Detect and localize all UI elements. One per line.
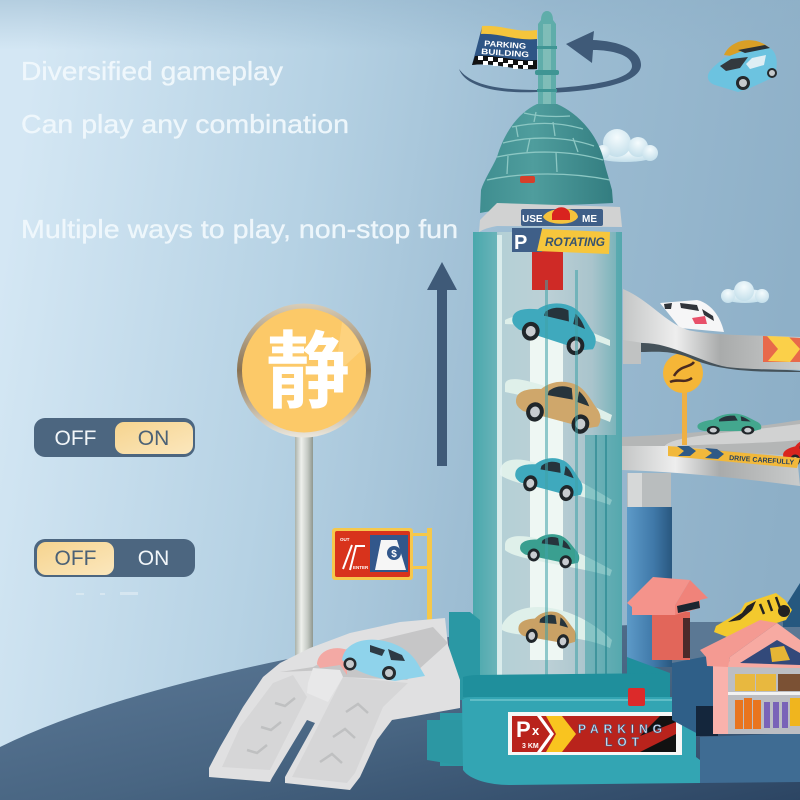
quiet sign xyxy=(237,304,371,661)
spiral shelves xyxy=(500,316,612,648)
shelf goods xyxy=(735,674,755,691)
parking lot label xyxy=(508,712,682,755)
red dome light xyxy=(520,176,535,183)
text: headline lines: Multiple ways to play, non-stop fun xyxy=(21,214,458,244)
blue van icon xyxy=(708,40,777,92)
dome xyxy=(480,104,613,213)
white core xyxy=(530,320,563,660)
clouds xyxy=(595,129,658,162)
rotating sign: ROTATING xyxy=(545,235,605,249)
rotating sign: P xyxy=(514,232,527,254)
flag: BUILDING xyxy=(481,47,529,59)
spiral ramp: upper level xyxy=(623,289,800,372)
yellow warning road sign xyxy=(663,353,703,445)
text: headline lines xyxy=(21,56,458,244)
entry sign: OUT xyxy=(340,537,350,542)
entry sign: ENTER xyxy=(353,565,369,570)
text: headline lines: Can play any combination xyxy=(21,109,349,139)
parking lot label: P xyxy=(516,717,531,742)
use me badge: USE xyxy=(522,214,543,225)
green car xyxy=(697,414,761,434)
flag xyxy=(472,26,537,69)
glass stripes xyxy=(473,232,622,677)
up arrow xyxy=(427,262,457,466)
faint smudge under toggle xyxy=(76,592,138,595)
chevrons xyxy=(763,336,800,362)
white van xyxy=(660,300,724,332)
toggle: on xyxy=(34,418,195,457)
toggle: off: OFF xyxy=(54,547,96,570)
entry sign: $ xyxy=(391,549,397,560)
parking lot label: x xyxy=(532,723,540,738)
tower xyxy=(473,11,622,677)
use me badge xyxy=(521,207,603,226)
blue car on ramp xyxy=(342,640,425,681)
deck surface xyxy=(280,627,448,680)
right playset base xyxy=(672,583,800,783)
toggle: off xyxy=(34,539,195,577)
quiet sign: 静 xyxy=(266,325,350,419)
toggle: on: ON xyxy=(138,427,169,450)
pink kiosk xyxy=(627,577,708,660)
floor xyxy=(0,620,800,800)
tower cars xyxy=(507,290,604,360)
rotating sign xyxy=(512,228,610,254)
teal tower base xyxy=(427,612,700,785)
dome bricks xyxy=(487,112,610,180)
tower glass body xyxy=(473,232,622,677)
entry sign xyxy=(332,528,432,656)
parking lot label: 3 KM xyxy=(522,743,539,750)
use me badge: ME xyxy=(582,214,597,225)
spiral ramp: lower level xyxy=(622,414,800,486)
ramp body xyxy=(209,618,460,790)
toggle: off: ON xyxy=(138,547,169,570)
right ramp surface xyxy=(292,677,408,783)
spiral ramp: lower level: DRIVE CAREFULLY xyxy=(729,455,795,467)
entry ramp xyxy=(209,528,460,790)
top collar xyxy=(479,203,622,232)
red button xyxy=(628,688,645,706)
spire xyxy=(535,11,559,105)
left ramp surface xyxy=(222,675,307,770)
parking lot label: LOT xyxy=(605,735,640,749)
red car xyxy=(783,439,800,466)
warning strip xyxy=(668,446,800,468)
centre block xyxy=(307,668,343,702)
red core xyxy=(532,250,563,290)
text: headline lines: Diversified gameplay xyxy=(21,56,283,86)
pink shop xyxy=(700,620,800,734)
pink bumper xyxy=(317,648,347,675)
rotate arrow xyxy=(459,31,641,93)
blue support column xyxy=(627,473,800,682)
flag: PARKING xyxy=(484,39,526,51)
yellow car xyxy=(714,593,792,640)
toggle: on: OFF xyxy=(54,427,96,450)
parking lot label: PARKING xyxy=(578,722,662,736)
